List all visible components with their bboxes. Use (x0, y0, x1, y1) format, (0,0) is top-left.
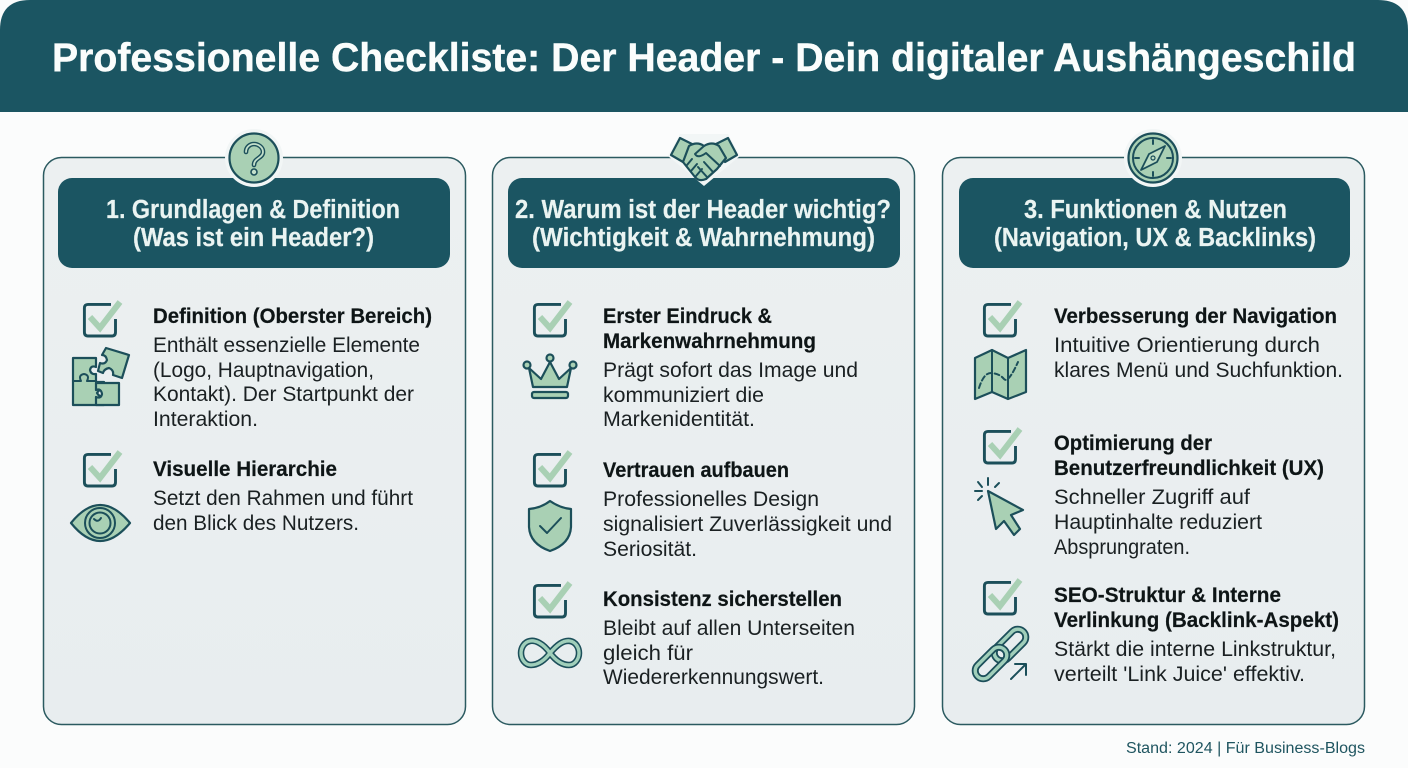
text: Benutzerfreundlichkeit: Absprungraten. (1054, 536, 1190, 559)
icon: map (975, 350, 1026, 399)
text: Konsistenz: Bleibt auf allen Unterseiten (603, 617, 855, 640)
text: Vertrauen aufbauen: signalisiert Zuverlässigkeit und (603, 513, 892, 536)
text: Konsistenz: Konsistenz sicherstellen (603, 588, 842, 611)
item: Visuelle Hierarchie (71, 452, 413, 541)
panel heading 1 (58, 178, 450, 268)
panel heading 2: 2. Warum ist der Header wichtig? (515, 196, 891, 224)
text: Definition (153, 305, 432, 431)
panel heading 3: (Navigation, UX & Backlinks) (994, 224, 1316, 252)
text: Navigation: klares Menü und Suchfunktion. (1054, 359, 1343, 382)
panel heading 3 (959, 178, 1350, 268)
item: SEO-Struktur (972, 580, 1339, 686)
text: Konsistenz: Wiedererkennungswert. (603, 666, 824, 689)
text: Visuelle Hierarchie: Visuelle Hierarchie (153, 458, 337, 481)
text: Konsistenz: gleich für (603, 642, 693, 665)
text: Erster Eindruck (603, 305, 858, 431)
text: Konsistenz (603, 588, 855, 689)
text: SEO-Struktur (1054, 584, 1339, 686)
item: Benutzerfreundlichkeit (975, 429, 1324, 559)
checkbox (984, 429, 1020, 463)
title banner (0, 0, 1408, 112)
text: Definition: Interaktion. (153, 408, 258, 431)
text: Benutzerfreundlichkeit: Schneller Zugriff auf (1054, 486, 1250, 509)
text: Vertrauen aufbauen: Professionelles Design (603, 488, 819, 511)
text: Erster Eindruck: kommuniziert die (603, 384, 764, 407)
icon: link (972, 626, 1030, 682)
item: Erster Eindruck (524, 302, 858, 431)
icon: compass (1124, 129, 1182, 187)
panel heading 1: 1. Grundlagen & Definition (106, 196, 400, 224)
checkbox (84, 302, 120, 336)
text: Visuelle Hierarchie: den Blick des Nutzers. (153, 512, 359, 535)
icon: cursor (975, 478, 1023, 535)
icon: shield (529, 501, 571, 551)
checkbox (984, 302, 1020, 336)
text: Definition: (Logo, Hauptnavigation, (153, 359, 374, 382)
panel: Warum ist der Header wichtig (492, 134, 914, 724)
panel: Grundlagen & Definition (44, 129, 466, 724)
text: Navigation: Verbesserung der Navigation (1054, 305, 1337, 328)
icon: eye (71, 505, 130, 541)
checkbox (984, 580, 1020, 614)
panel: Funktionen & Nutzen (942, 129, 1364, 724)
text: Definition: Definition (Oberster Bereich) (153, 305, 432, 328)
text: Benutzerfreundlichkeit (1054, 432, 1324, 559)
panel heading 2: (Wichtigkeit & Wahrnehmung) (532, 224, 875, 252)
icon: infinity (521, 641, 579, 665)
text: Vertrauen aufbauen: Vertrauen aufbauen (603, 459, 789, 482)
text: Navigation: Intuitive Orientierung durch (1054, 334, 1320, 357)
checkbox (534, 302, 570, 336)
title: Professionelle Checkliste: Der Header - Dein digitaler Aushängeschild (52, 36, 1356, 80)
icon: handshake (668, 134, 740, 186)
text: Vertrauen aufbauen: Seriosität. (603, 538, 697, 561)
icon: crown (524, 354, 576, 398)
panel heading 3: 3. Funktionen & Nutzen (1024, 196, 1287, 224)
text: SEO-Struktur: verteilt 'Link Juice' effektiv. (1054, 663, 1305, 686)
text: Definition: Kontakt). Der Startpunkt der (153, 383, 414, 406)
icon: puzzle (73, 348, 129, 405)
item: Definition (73, 302, 432, 431)
text: Visuelle Hierarchie: Setzt den Rahmen und führt (153, 487, 413, 510)
panel heading 2 (508, 178, 900, 268)
text: Definition: Enthält essenzielle Elemente (153, 334, 420, 357)
text: Erster Eindruck: Erster Eindruck & (603, 305, 772, 328)
text: SEO-Struktur: SEO-Struktur & Interne (1054, 584, 1281, 607)
text: Vertrauen aufbauen (603, 459, 892, 561)
text: Erster Eindruck: Markenwahrnehmung (603, 330, 816, 353)
item: Navigation (975, 302, 1343, 399)
text: Erster Eindruck: Markenidentität. (603, 408, 755, 431)
footer note: Stand: 2024 | Für Business-Blogs (1126, 740, 1365, 757)
text: SEO-Struktur: Verlinkung (Backlink-Aspekt) (1054, 609, 1339, 632)
icon: question mark (225, 129, 283, 187)
text: Erster Eindruck: Prägt sofort das Image und (603, 359, 858, 382)
text: Navigation (1054, 305, 1343, 382)
panel heading 1: (Was ist ein Header?) (133, 224, 374, 252)
text: Benutzerfreundlichkeit: Optimierung der (1054, 432, 1212, 455)
item: Konsistenz (521, 583, 855, 689)
text: Visuelle Hierarchie (153, 458, 413, 535)
checkbox (534, 583, 570, 617)
text: SEO-Struktur: Stärkt die interne Linkstruktur, (1054, 638, 1336, 661)
checkbox (534, 452, 570, 486)
item: Vertrauen aufbauen (529, 452, 892, 561)
text: Benutzerfreundlichkeit: Benutzerfreundlichkeit (UX) (1054, 457, 1324, 480)
text: Benutzerfreundlichkeit: Hauptinhalte reduziert (1054, 511, 1262, 534)
checkbox (84, 452, 120, 486)
